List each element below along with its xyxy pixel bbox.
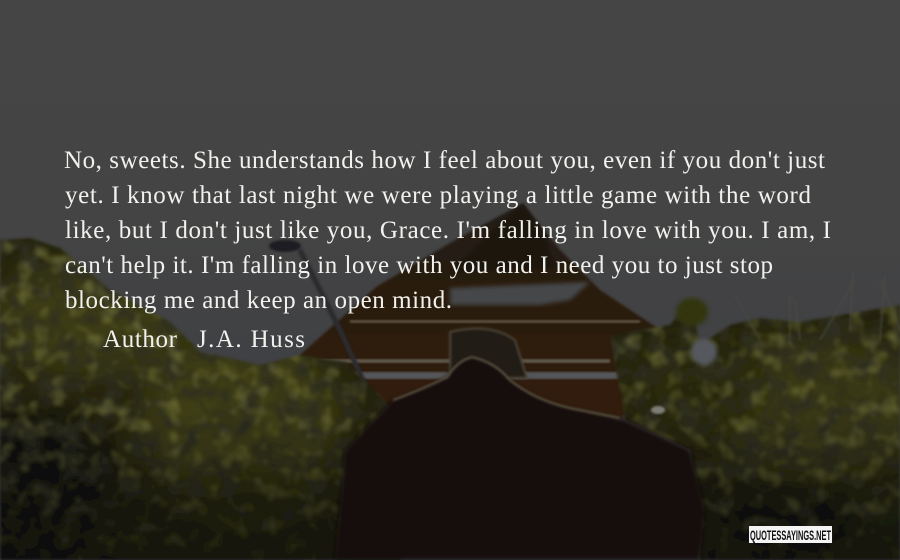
- canoe hull: [300, 203, 680, 420]
- foliage bottom shade: [0, 300, 900, 560]
- quote line 5: blocking me and keep an open mind.: [65, 287, 452, 314]
- quote line 3: like, but I don't just like you, Grace. I'm falling in love with you. I am, I: [65, 217, 831, 244]
- watermark: [749, 526, 832, 543]
- foliage: left and right tree masses: [0, 235, 900, 560]
- canoe seat wedge: [450, 282, 590, 305]
- paddle blade: [269, 240, 301, 252]
- background: canoe: [269, 203, 680, 420]
- quote line 1: No, sweets. She understands how I feel about you, even if you don't just: [64, 147, 825, 174]
- foreground canoe bow, dark: [335, 357, 705, 560]
- canoe dark bow cap: [450, 205, 555, 272]
- small tree on the shore: [676, 298, 708, 326]
- quote text: [64, 147, 831, 314]
- pale patch among the leaves: [651, 406, 665, 414]
- bow rim highlight: [393, 357, 620, 418]
- lake glimpse: [691, 339, 717, 365]
- author name: J.A. Huss: [197, 326, 305, 353]
- watermark box: [749, 526, 832, 543]
- watermark text: QUOTESSAYINGS.NET: [750, 527, 831, 543]
- dark bow shape: [335, 357, 705, 560]
- foliage light mottling: [0, 235, 900, 560]
- author attribution: [103, 326, 305, 353]
- foliage dark mottling: [0, 235, 900, 560]
- foliage olive patches: [0, 265, 900, 560]
- canoe plank one: [350, 320, 640, 323]
- paddle pole: [300, 250, 372, 400]
- quote line 2: yet. I know that last night we were playing a little game with the word: [65, 182, 812, 209]
- canoe plank three: [335, 372, 660, 379]
- author label: Author: [103, 326, 178, 353]
- reeds, right side: [735, 270, 900, 345]
- foliage base colour: [0, 235, 900, 560]
- quote line 4: can't help it. I'm falling in love with you and I need you to just stop: [65, 252, 773, 279]
- canoe seat back: [450, 328, 527, 378]
- canoe plank two: [310, 359, 610, 363]
